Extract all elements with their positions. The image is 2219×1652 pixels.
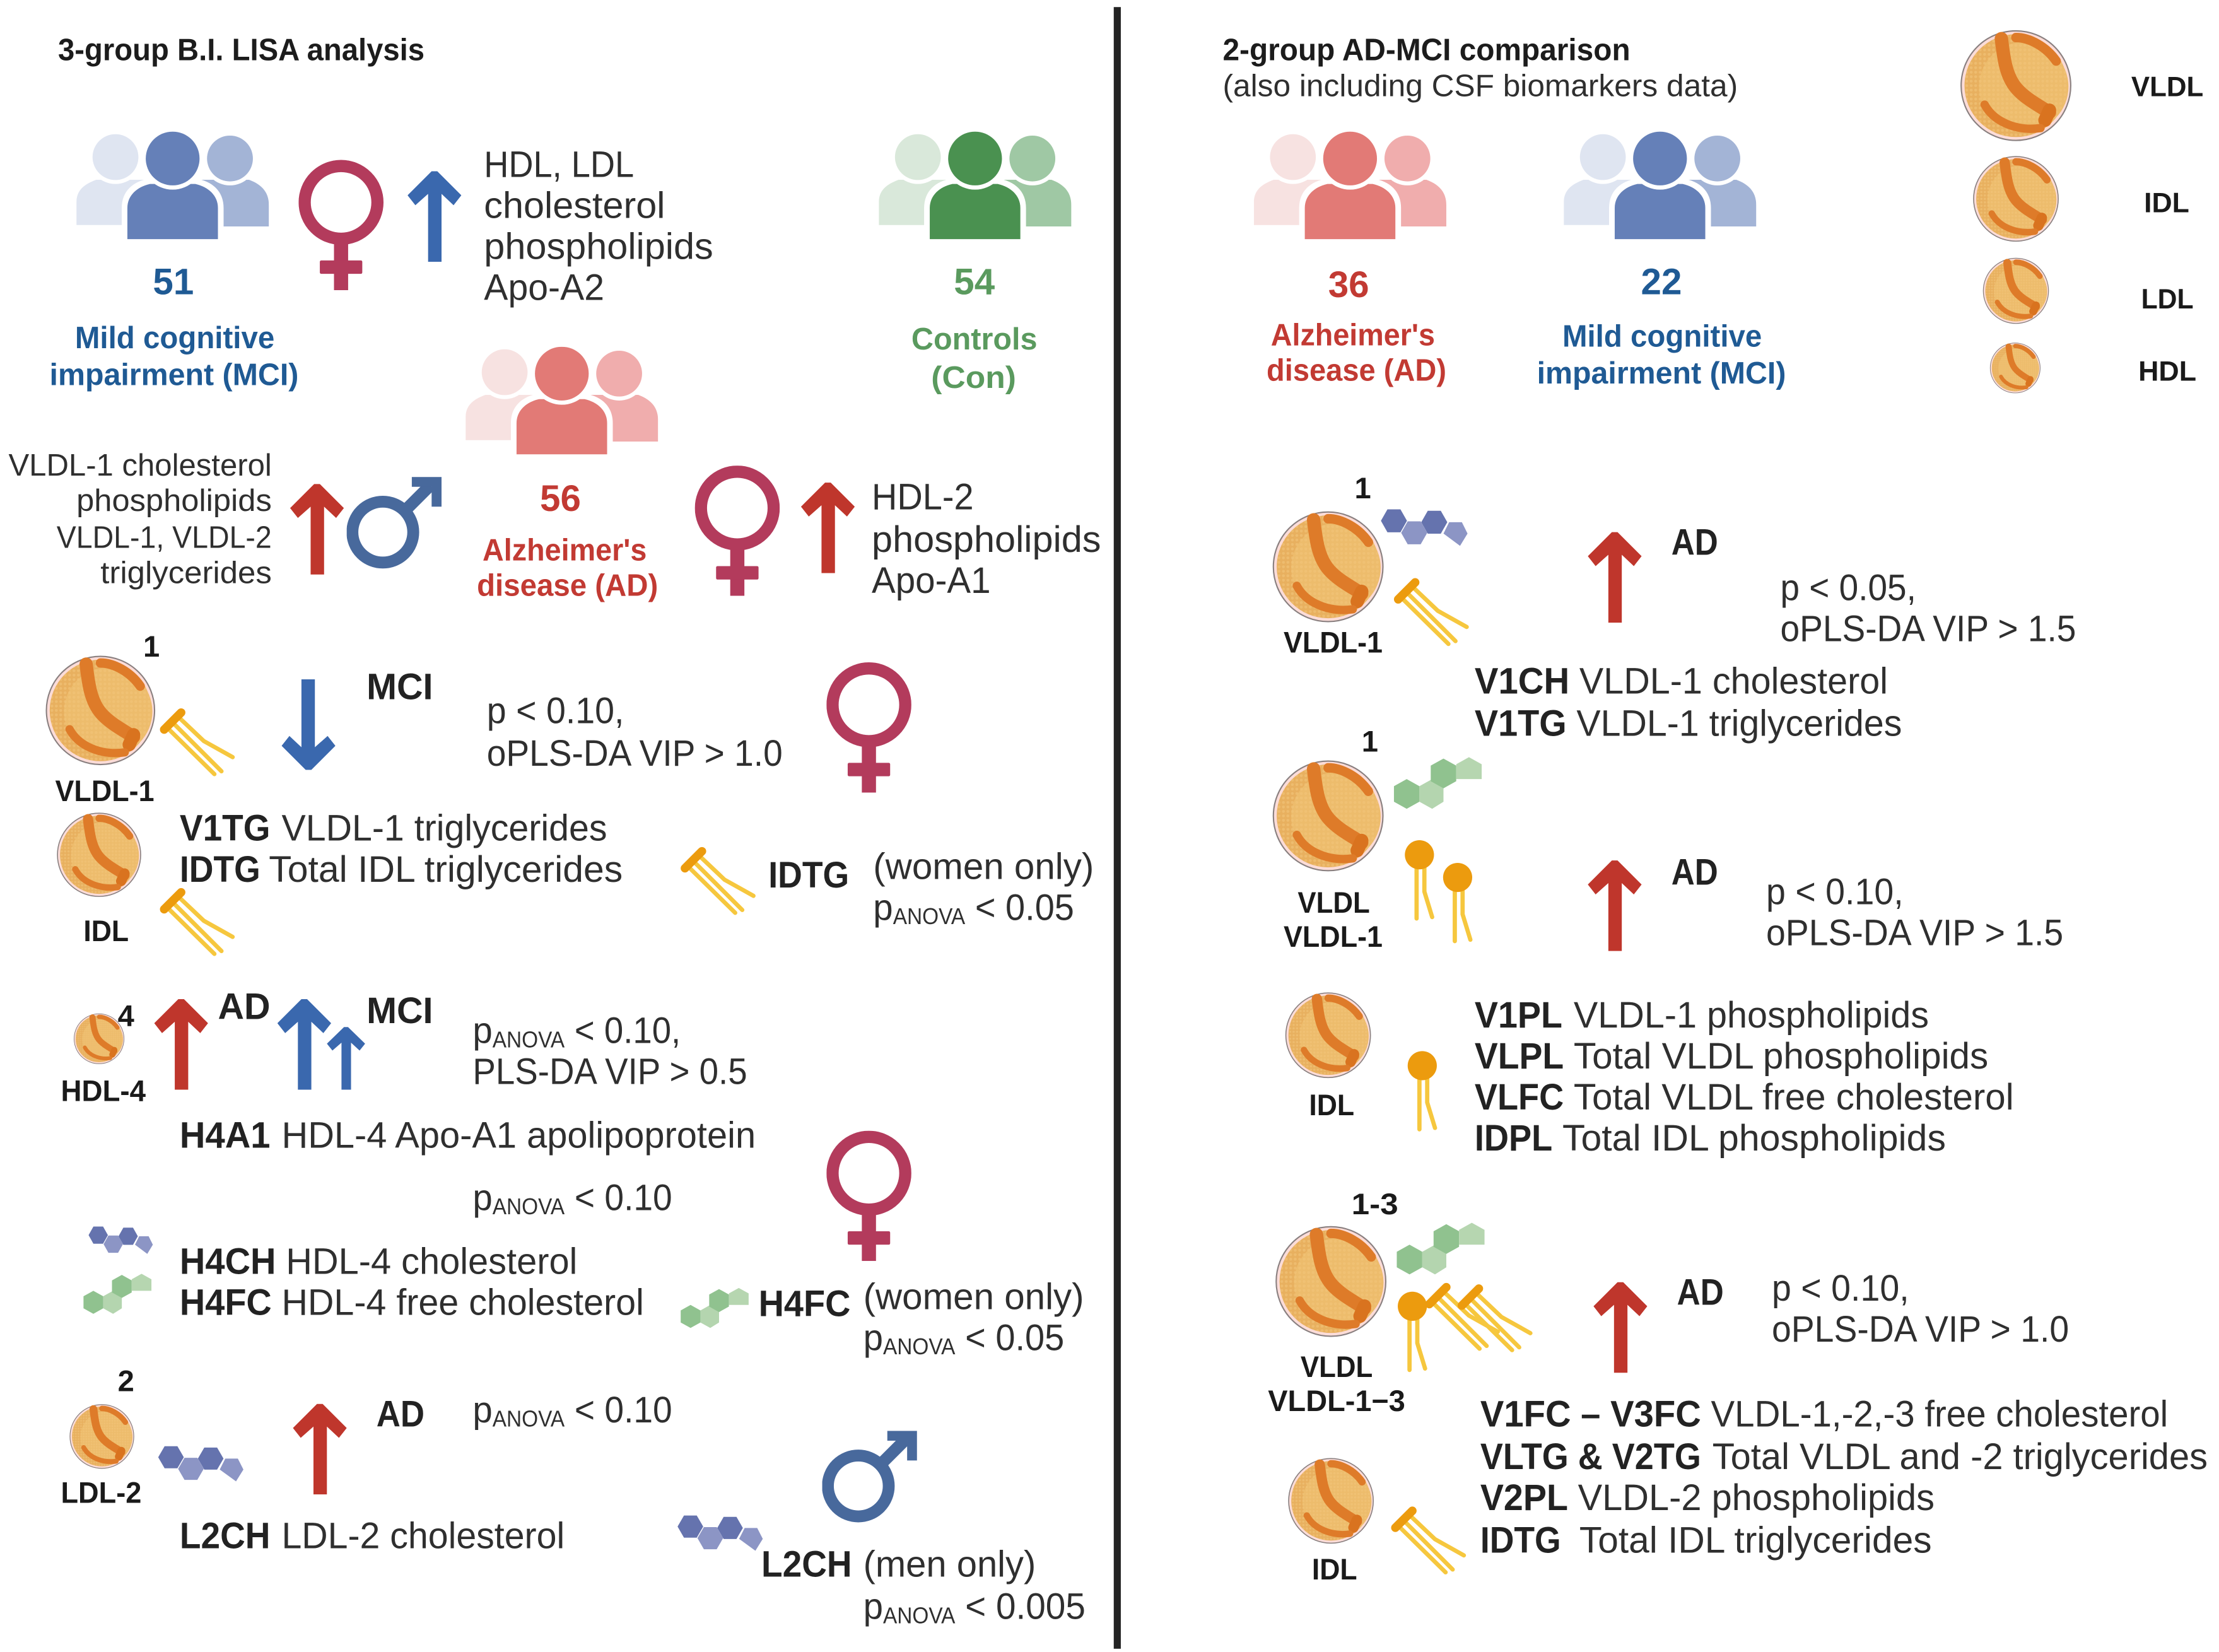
- stats: VLDL-1 and IDL: [487, 690, 783, 774]
- icon: VLDL-1-3 with lipids: [1268, 1187, 1530, 1417]
- arrow: LDL-2 AD raised: AD: [377, 1394, 424, 1435]
- icon: VLDL-1 particle with triglyceride: VLDL-1: [56, 774, 155, 807]
- text: VLDL and IDL list: IDTG: [1480, 1520, 1561, 1561]
- icon: HDL-4 particle: 4: [118, 999, 134, 1033]
- finding: women AD raised HDL-2: phospholipids: [872, 519, 1101, 560]
- stats: H4CH and H4FC: [472, 1177, 672, 1219]
- finding: women AD raised HDL-2: HDL-2: [872, 477, 974, 518]
- callout: H4FC women only: < 0.05: [965, 1317, 1064, 1358]
- group: alzheimer's disease: disease (AD): [1267, 353, 1446, 388]
- text: VLDL and IDL list: VLTG & V2TG: [1480, 1436, 1701, 1477]
- stats: block 1: [1780, 567, 2076, 649]
- title: 3-group analysis: 3-group B.I. LISA analysis: [58, 32, 424, 67]
- arrow: AD raised: AD: [1672, 522, 1718, 563]
- callout: H4FC women only: [681, 1276, 1084, 1359]
- stats: block 3: oPLS-DA VIP > 1.0: [1772, 1309, 2069, 1350]
- stats: LDL-2: < 0.10: [575, 1390, 672, 1431]
- text: VLDL and IDL list: [1480, 1394, 2208, 1561]
- finding: women AD raised HDL-2: [701, 472, 1101, 601]
- text: H4CH and H4FC: H4CH: [180, 1241, 276, 1282]
- callout: L2CH men only: < 0.005: [965, 1586, 1086, 1627]
- icon: VLDL with free cholesterol and phospholipids: VLDL: [1297, 886, 1370, 919]
- stats: block 2: p < 0.10,: [1766, 872, 1904, 913]
- arrow: LDL-2 AD raised: [293, 1394, 424, 1494]
- text: V1CH and V1TG: VLDL-1 cholesterol: [1579, 660, 1888, 701]
- icon: VLDL-1-3 with lipids: 1-3: [1352, 1187, 1398, 1221]
- icon: VLDL-1 particle with triglyceride: 1: [143, 630, 160, 663]
- text: phospholipid and free cholesterol list: Total IDL phospholipids: [1562, 1118, 1946, 1159]
- icon: female: [833, 1137, 905, 1261]
- legend: particle sizes: LDL: [2141, 283, 2194, 315]
- callout: H4FC women only: p: [864, 1317, 883, 1358]
- icon: IDL with phospholipid: IDL: [1309, 1088, 1354, 1122]
- callout: H4FC women only: ANOVA: [883, 1334, 956, 1359]
- text: phospholipid and free cholesterol list: IDPL: [1475, 1118, 1552, 1159]
- icon: VLDL-1 with cholesterol and triglyceride: VLDL-1: [1284, 625, 1383, 659]
- callout: L2CH men only: (men only): [864, 1544, 1036, 1585]
- text: V1CH and V1TG: [1475, 660, 1902, 744]
- panel: 3-group analysis: [8, 32, 1101, 1628]
- text: H4A1: HDL-4 Apo-A1 apolipoprotein: [281, 1115, 756, 1156]
- arrow: AD raised: AD: [1672, 852, 1718, 893]
- icon: cholesterol: [88, 1227, 153, 1254]
- stats: LDL-2: ANOVA: [493, 1407, 565, 1432]
- stats: H4CH and H4FC: ANOVA: [493, 1194, 565, 1219]
- icon: VLDL with free cholesterol and phospholipids: 1: [1362, 724, 1378, 758]
- stats: VLDL-1 and IDL: oPLS-DA VIP > 1.0: [487, 733, 783, 774]
- arrows: HDL-4 AD and MCI raised: [155, 986, 433, 1090]
- group: alzheimer's disease: disease (AD): [477, 568, 658, 603]
- text: H4CH and H4FC: HDL-4 cholesterol: [286, 1241, 577, 1282]
- group: mild cognitive impairment: Mild cognitive: [75, 320, 274, 355]
- panel: 2-group comparison: [1222, 31, 2208, 1586]
- icon: IDL particle with triglyceride: [57, 813, 233, 954]
- icon: VLDL-1 particle with triglyceride: [47, 630, 233, 807]
- arrows: HDL-4 AD and MCI raised: AD: [218, 986, 271, 1027]
- callout: L2CH men only: ANOVA: [883, 1603, 956, 1628]
- group: mild cognitive impairment: 51: [153, 262, 194, 303]
- stats: block 2: [1766, 872, 2063, 954]
- callout: IDTG women only: [685, 846, 1094, 929]
- text: phospholipid and free cholesterol list: [1475, 995, 2014, 1159]
- icon: HDL-4 particle: [61, 999, 146, 1108]
- text: V1CH and V1TG: V1TG: [1475, 703, 1567, 744]
- stats: VLDL-1 and IDL: p < 0.10,: [487, 690, 624, 731]
- legend: particle sizes: HDL: [2138, 355, 2196, 387]
- title: 2-group comparison: (also including CSF biomarkers data): [1222, 69, 1738, 103]
- stats: HDL-4: ANOVA: [493, 1027, 565, 1052]
- text: V1TG and IDTG: V1TG: [180, 808, 271, 849]
- text: phospholipid and free cholesterol list: Total VLDL free cholesterol: [1574, 1077, 2014, 1118]
- text: VLDL and IDL list: VLDL-1,-2,-3 free cholesterol: [1711, 1394, 2168, 1435]
- icon: HDL-4 particle: HDL-4: [61, 1074, 146, 1108]
- title: 2-group comparison: [1222, 32, 1738, 103]
- text: V1TG and IDTG: [180, 808, 623, 890]
- text: VLDL and IDL list: Total VLDL and -2 triglycerides: [1713, 1436, 2208, 1477]
- finding: women MCI raised lipids: cholesterol: [484, 185, 665, 226]
- icon: IDL with phospholipid: [1286, 993, 1437, 1129]
- text: L2CH: L2CH: [180, 1516, 271, 1557]
- icon: VLDL-1 with cholesterol and triglyceride: 1: [1355, 471, 1371, 505]
- finding: men AD raised VLDL: triglycerides: [100, 555, 272, 590]
- finding: men AD raised VLDL: VLDL-1 cholesterol: [8, 448, 272, 483]
- icon: VLDL-1-3 with lipids: VLDL: [1301, 1350, 1373, 1383]
- text: phospholipid and free cholesterol list: VLFC: [1475, 1077, 1564, 1118]
- finding: women MCI raised lipids: phospholipids: [484, 226, 713, 267]
- group: controls: (Con): [931, 360, 1016, 395]
- group: alzheimer's disease: Alzheimer's: [483, 532, 647, 567]
- group: mild cognitive impairment: [1537, 127, 1786, 390]
- arrow: MCI decreased: MCI: [366, 666, 433, 707]
- stats: HDL-4: < 0.10,: [575, 1011, 681, 1052]
- icon: IDL with triglyceride: [1289, 1458, 1464, 1586]
- group: alzheimer's disease: Alzheimer's: [1271, 317, 1435, 352]
- text: phospholipid and free cholesterol list: Total VLDL phospholipids: [1574, 1036, 1988, 1077]
- stats: block 3: [1772, 1268, 2069, 1350]
- text: L2CH: LDL-2 cholesterol: [281, 1516, 565, 1557]
- stats: HDL-4: [472, 1011, 747, 1093]
- text: VLDL and IDL list: VLDL-2 phospholipids: [1578, 1477, 1935, 1518]
- icon: VLDL-1 with cholesterol and triglyceride: [1273, 471, 1468, 659]
- text: phospholipid and free cholesterol list: VLPL: [1475, 1036, 1564, 1077]
- icon: VLDL with free cholesterol and phospholipids: VLDL-1: [1284, 920, 1383, 953]
- stats: block 2: oPLS-DA VIP > 1.5: [1766, 913, 2063, 954]
- text: V1TG and IDTG: Total IDL triglycerides: [269, 849, 623, 890]
- icon: VLDL with free cholesterol and phospholipids: [1273, 724, 1482, 953]
- text: VLDL and IDL list: V1FC – V3FC: [1480, 1394, 1701, 1435]
- group: mild cognitive impairment: impairment (MCI): [1537, 356, 1786, 390]
- icon: male: [828, 1431, 917, 1516]
- arrow: AD raised: [1593, 1272, 1724, 1373]
- arrows: HDL-4 AD and MCI raised: MCI: [366, 990, 433, 1031]
- text: V1CH and V1TG: VLDL-1 triglycerides: [1576, 703, 1902, 744]
- callout: IDTG women only: (women only): [873, 846, 1094, 887]
- text: V1TG and IDTG: IDTG: [180, 849, 261, 890]
- legend: particle sizes: VLDL: [2131, 71, 2203, 103]
- group: mild cognitive impairment: [50, 127, 298, 392]
- arrow: AD raised: AD: [1677, 1272, 1724, 1313]
- arrow: AD raised: [1588, 852, 1718, 951]
- callout: L2CH men only: [677, 1516, 1086, 1628]
- arrow: MCI decreased: [281, 666, 433, 770]
- finding: men AD raised VLDL: VLDL-1, VLDL-2: [57, 520, 272, 554]
- text: phospholipid and free cholesterol list: VLDL-1 phospholipids: [1574, 995, 1929, 1036]
- group: mild cognitive impairment: 22: [1641, 262, 1682, 303]
- icon: LDL-2 particle with cholesterol: 2: [118, 1364, 134, 1397]
- stats: H4CH and H4FC: < 0.10: [575, 1177, 672, 1218]
- text: VLDL and IDL list: Total IDL triglycerides: [1579, 1520, 1932, 1561]
- stats: HDL-4: p: [472, 1011, 493, 1052]
- stats: LDL-2: p: [472, 1390, 493, 1431]
- stats: H4CH and H4FC: p: [472, 1177, 493, 1218]
- stats: LDL-2: [472, 1390, 672, 1432]
- group: controls: 54: [954, 262, 995, 303]
- callout: H4FC women only: H4FC: [759, 1284, 850, 1325]
- legend: particle sizes: [1961, 31, 2203, 393]
- text: H4A1: H4A1: [180, 1115, 271, 1156]
- group: alzheimer's disease: [1254, 127, 1446, 388]
- text: H4CH and H4FC: [180, 1241, 644, 1323]
- callout: L2CH men only: p: [864, 1586, 883, 1627]
- icon: LDL-2 particle with cholesterol: [61, 1364, 243, 1509]
- finding: women MCI raised lipids: [305, 144, 713, 308]
- group: alzheimer's disease: [465, 343, 658, 603]
- icon: IDL with triglyceride: IDL: [1312, 1552, 1357, 1586]
- icon: VLDL-1-3 with lipids: VLDL-1−3: [1268, 1384, 1405, 1417]
- group: alzheimer's disease: 56: [540, 478, 581, 519]
- callout: IDTG women only: ANOVA: [893, 904, 965, 929]
- text: V1CH and V1TG: V1CH: [1475, 660, 1569, 701]
- finding: men AD raised VLDL: [8, 448, 442, 590]
- text: phospholipid and free cholesterol list: V1PL: [1475, 995, 1562, 1036]
- legend: particle sizes: IDL: [2144, 187, 2189, 219]
- group: mild cognitive impairment: impairment (MCI): [50, 357, 298, 392]
- icon: free cholesterol: [83, 1274, 151, 1314]
- icon: LDL-2 particle with cholesterol: LDL-2: [61, 1476, 141, 1509]
- callout: IDTG women only: < 0.05: [975, 887, 1074, 928]
- callout: IDTG women only: IDTG: [768, 855, 849, 896]
- finding: women MCI raised lipids: Apo-A2: [484, 267, 604, 308]
- stats: block 1: p < 0.05,: [1780, 567, 1916, 608]
- stats: block 1: oPLS-DA VIP > 1.5: [1780, 608, 2076, 649]
- group: alzheimer's disease: 36: [1328, 264, 1369, 305]
- group: controls: Controls: [911, 322, 1038, 356]
- finding: men AD raised VLDL: phospholipids: [76, 483, 272, 518]
- icon: IDL particle with triglyceride: IDL: [83, 914, 129, 947]
- stats: block 3: p < 0.10,: [1772, 1268, 1909, 1309]
- text: VLDL and IDL list: V2PL: [1480, 1477, 1568, 1518]
- finding: women AD raised HDL-2: Apo-A1: [872, 560, 991, 601]
- callout: IDTG women only: p: [873, 887, 893, 928]
- group: mild cognitive impairment: Mild cognitive: [1562, 319, 1762, 354]
- callout: L2CH men only: L2CH: [761, 1544, 852, 1585]
- stats: HDL-4: PLS-DA VIP > 0.5: [472, 1052, 747, 1093]
- text: V1TG and IDTG: VLDL-1 triglycerides: [281, 808, 607, 849]
- text: H4CH and H4FC: H4FC: [180, 1282, 272, 1323]
- divider: [1114, 7, 1121, 1649]
- icon: female: [833, 669, 905, 792]
- title: 2-group comparison: 2-group AD-MCI comparison: [1222, 32, 1631, 67]
- arrow: AD raised: [1588, 522, 1718, 623]
- text: H4CH and H4FC: HDL-4 free cholesterol: [281, 1282, 644, 1323]
- group: controls: [879, 127, 1071, 395]
- callout: H4FC women only: (women only): [864, 1276, 1084, 1317]
- finding: women MCI raised lipids: HDL, LDL: [484, 144, 634, 185]
